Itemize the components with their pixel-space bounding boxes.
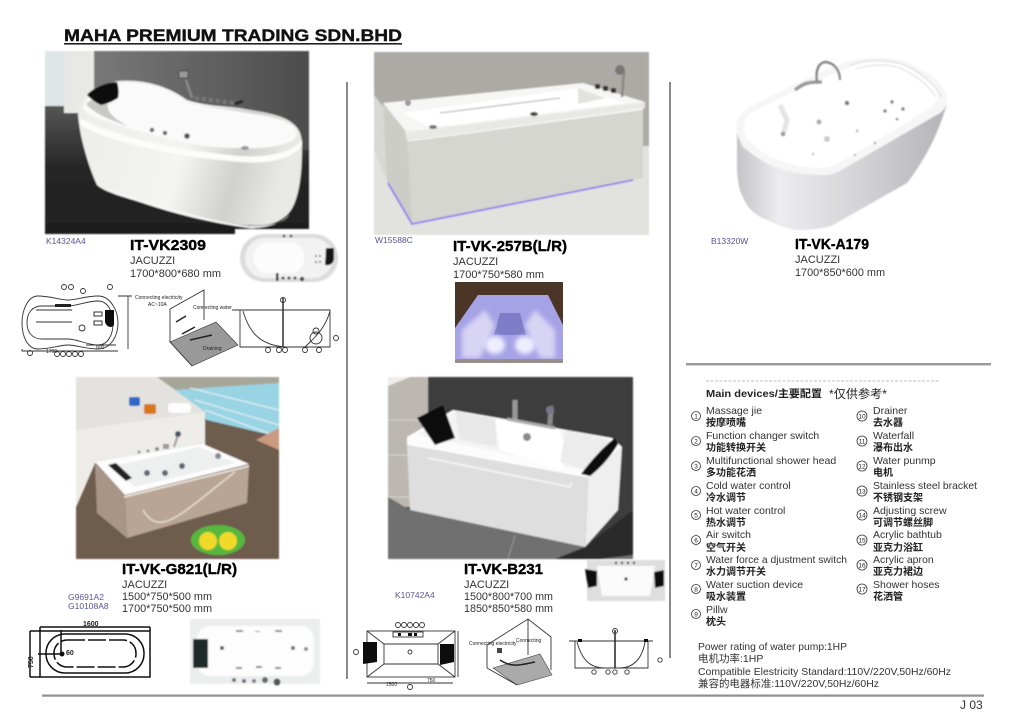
list: right column: 去水器 [873, 416, 903, 429]
list: left column: 8 [694, 586, 698, 593]
photo: IT-VK-A179 bathtub [736, 58, 947, 230]
photo: IT-VK-B231 bathtub [388, 377, 633, 559]
list: left column: Pillw [706, 604, 728, 616]
code label: B13320W [711, 236, 748, 246]
heading: main devices: *仅供参考* [829, 386, 887, 401]
product: IT-VK-B231 text: IT-VK-B231 [464, 561, 543, 578]
diagram: IT-VK-G821 plan: 750 [28, 656, 35, 668]
diagram: IT-VK2309 connection: AC~10A [148, 302, 167, 308]
list: right column: 10 [858, 413, 866, 420]
heading: main devices: Main devices/主要配置 [706, 387, 822, 400]
list: left column: 功能转换开关 [706, 441, 766, 454]
list: left column: 多功能花洒 [706, 466, 756, 479]
list: left column: Water suction device [706, 579, 803, 591]
list: left column: Water force a djustment switch [706, 554, 847, 566]
list: left column: 热水调节 [706, 516, 746, 529]
product: IT-VK2309 text [130, 237, 221, 280]
code label: K10742A4 [395, 590, 435, 600]
code labels [68, 592, 109, 611]
list: right column: Drainer [873, 405, 908, 417]
list: right column: Adjusting screw [873, 505, 947, 517]
list: right column: 14 [858, 512, 866, 519]
product: IT-VK-A179 text: IT-VK-A179 [795, 236, 869, 253]
list: left column: 吸水装置 [706, 590, 746, 603]
list: left column: 1 [694, 413, 698, 420]
product: IT-VK-257B text [453, 238, 567, 281]
list: left column: 2 [694, 438, 698, 445]
product: IT-VK2309 text: IT-VK2309 [130, 237, 206, 254]
product: IT-VK-B231 text: 1500*800*700 mm [464, 591, 553, 603]
list: left column: 水力调节开关 [706, 565, 766, 578]
product: IT-VK2309 text: JACUZZI [130, 255, 175, 267]
product: IT-VK-G821 text: JACUZZI [122, 579, 167, 591]
list: left column: Cold water control [706, 480, 791, 492]
list: right column: 13 [858, 488, 866, 495]
page number: J 03 [960, 698, 983, 712]
product: IT-VK-257B text: IT-VK-257B(L/R) [453, 238, 567, 255]
bottom rule [42, 694, 984, 697]
list: right column: Acrylic bathtub [873, 529, 942, 541]
product: IT-VK-B231 text: JACUZZI [464, 579, 509, 591]
diagram: IT-VK-G821 plan [28, 621, 150, 677]
list: right column: Waterfall [873, 430, 914, 442]
list: left column: 9 [694, 611, 698, 618]
product: IT-VK-A179 text: 1700*850*600 mm [795, 267, 885, 279]
list: left column [692, 405, 847, 628]
vertical divider left [346, 82, 348, 679]
vertical divider right [669, 82, 671, 658]
list: left column: 5 [694, 512, 698, 519]
product: IT-VK2309 text: 1700*800*680 mm [130, 268, 221, 280]
code labels: G9691A2 [68, 592, 104, 602]
power and electricity notes [698, 641, 951, 690]
diagram: IT-VK-B231 plan: 1500 [386, 682, 397, 688]
list: right column: 亚克力浴缸 [873, 541, 923, 554]
product: IT-VK-G821 text [122, 561, 237, 615]
list: right column: 电机 [873, 466, 893, 479]
product: IT-VK-257B text: 1700*750*580 mm [453, 269, 544, 281]
list: left column: Air switch [706, 529, 751, 541]
list: right column: 11 [859, 438, 866, 445]
list: left column: 7 [694, 562, 698, 569]
diagram: IT-VK-B231 plan [354, 622, 458, 690]
list: right column: 花洒管 [873, 590, 903, 603]
heading: main devices [706, 386, 887, 401]
list: left column: 空气开关 [706, 541, 746, 554]
diagram: IT-VK2309 plan: 800 [96, 345, 105, 351]
list: left column: 6 [694, 537, 698, 544]
inset: IT-VK-B231 top view [585, 560, 665, 601]
list: right column: 12 [858, 463, 866, 470]
product: IT-VK-B231 text: 1850*850*580 mm [464, 603, 553, 615]
product: IT-VK-G821 text: IT-VK-G821(L/R) [122, 561, 237, 578]
diagram: IT-VK-B231 connection [469, 619, 552, 685]
list: right column: Shower hoses [873, 579, 940, 591]
list: left column: 枕头 [706, 615, 726, 628]
diagram: IT-VK-G821 plan: 60 [66, 650, 74, 657]
inset: IT-VK-G821 top view [190, 619, 320, 686]
title: MAHA PREMIUM TRADING SDN.BHD [64, 26, 402, 45]
product: IT-VK-B231 text [464, 561, 553, 615]
photo: IT-VK-G821 bathtub [76, 377, 279, 559]
list: left column: 4 [694, 488, 698, 495]
photo: IT-VK-257B bathtub [374, 52, 649, 235]
panel: main devices [692, 381, 977, 690]
power and electricity notes: Compatible Elestricity Standard:110V/220V,50Hz/60Hz [698, 666, 951, 678]
product: IT-VK-G821 text: 1500*750*500 mm [122, 591, 212, 603]
list: left column: Function changer switch [706, 430, 819, 442]
diagram: IT-VK-B231 connection: Connecting [516, 638, 542, 644]
horizontal rule above devices [686, 363, 991, 365]
list: right column: Acrylic apron [873, 554, 934, 566]
list: right column: 15 [858, 537, 866, 544]
list: right column: Stainless steel bracket [873, 480, 977, 492]
code labels: G10108A8 [68, 601, 109, 611]
diagram: IT-VK2309 connection: Connecting water [193, 305, 232, 311]
diagram: IT-VK-B231 plan: 750 [427, 678, 436, 684]
power and electricity notes: 兼容的电器标准:110V/220V,50Hz/60Hz [698, 677, 879, 690]
list: right column [857, 405, 977, 603]
diagram: IT-VK-B231 connection: Connecting electricity [469, 641, 517, 647]
diagram: IT-VK2309 side view [232, 298, 338, 352]
list: right column: 可调节螺丝脚 [873, 516, 933, 529]
photo: IT-VK2309 bathtub [45, 51, 309, 234]
inset: top view of IT-VK2309 [240, 234, 338, 282]
diagram: IT-VK-B231 side view [569, 628, 662, 674]
diagram: IT-VK2309 connection: Connecting electricity [135, 295, 183, 301]
list: right column: 16 [858, 562, 866, 569]
list: left column: 3 [694, 463, 698, 470]
code label: K14324A4 [46, 236, 86, 246]
list: right column: 瀑布出水 [873, 441, 913, 454]
product: IT-VK-A179 text [795, 236, 885, 279]
list: left column: 按摩喷嘴 [706, 416, 746, 429]
list: left column: Massage jie [706, 405, 762, 417]
power and electricity notes: 电机功率:1HP [698, 652, 763, 665]
list: left column: Hot water control [706, 505, 785, 517]
product: IT-VK-G821 text: 1700*750*500 mm [122, 603, 212, 615]
code label: W15588C [375, 235, 413, 245]
product: IT-VK-257B text: JACUZZI [453, 256, 498, 268]
diagram: IT-VK2309 plan [22, 284, 132, 356]
diagram: IT-VK-G821 plan: 1600 [83, 621, 99, 628]
list: right column: Water punmp [873, 455, 936, 467]
power and electricity notes: Power rating of water pump:1HP [698, 641, 847, 653]
diagram: IT-VK2309 plan: 1700 [46, 349, 57, 355]
list: right column: 亚克力裙边 [873, 565, 923, 578]
list: left column: 冷水调节 [706, 491, 746, 504]
diagram: IT-VK2309 connection: Draining [203, 346, 222, 352]
list: right column: 不锈钢支架 [873, 491, 923, 504]
diagram: IT-VK2309 connection [135, 290, 238, 366]
list: right column: 17 [858, 586, 866, 593]
list: left column: Multifunctional shower head [706, 455, 836, 467]
inset: lit tub [455, 282, 563, 363]
product: IT-VK-A179 text: JACUZZI [795, 254, 840, 266]
